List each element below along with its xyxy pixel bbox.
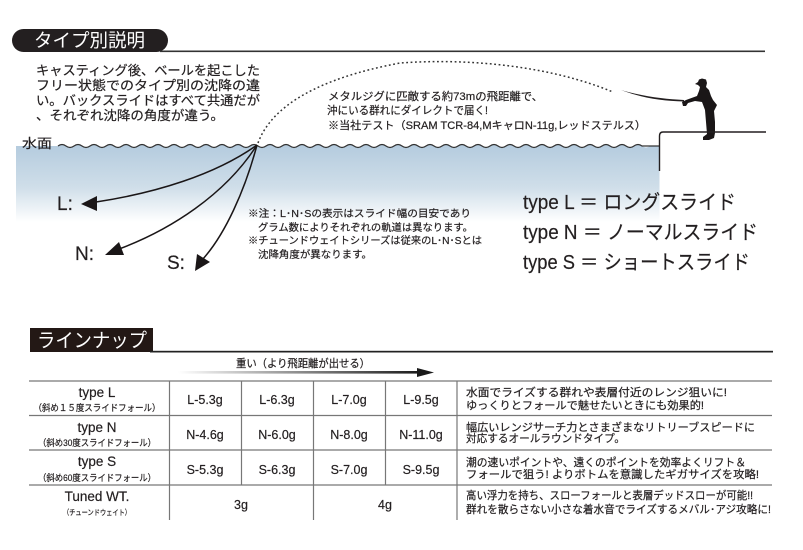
row: type N: N-8.0g xyxy=(330,428,368,442)
row: type N: type N xyxy=(77,420,117,435)
note: L N S caution: 沈降角度が異なります。 xyxy=(258,248,372,261)
descriptions: 高い浮力を持ち、スローフォールと表層デッドスローが可能!! xyxy=(466,488,753,502)
descriptions: フォールで狙う! よりボトムを意識したギガサイズを攻略! xyxy=(466,467,759,481)
heading: lineup: ラインナップ xyxy=(37,330,147,352)
arrow: type N xyxy=(105,145,257,255)
row: type N: N-6.0g xyxy=(258,428,296,442)
label: water surface: 水面 xyxy=(22,136,52,151)
intro text: キャスティング後、ベールを起こした xyxy=(36,63,260,78)
descriptions: ゆっくりとフォールで魅せたいときにも効果的! xyxy=(466,398,704,412)
intro text: フリー状態でのタイプ別の沈降の違 xyxy=(36,78,260,93)
descriptions xyxy=(466,385,771,516)
legend: type names: type L ＝ ロングスライド xyxy=(523,191,736,214)
labels: L N S: N: xyxy=(75,244,94,265)
water surface wave xyxy=(58,144,660,148)
row: tuned weight: （チューンドウェイト） xyxy=(63,508,131,517)
row: type S: S-7.0g xyxy=(331,463,367,477)
intro text xyxy=(36,63,260,123)
arrows: sink angles xyxy=(81,145,257,271)
intro text: い。バックスライドはすべて共通だが xyxy=(36,93,260,108)
descriptions: 水面でライズする群れや表層付近のレンジ狙いに! xyxy=(466,385,727,399)
row: type S: type S xyxy=(78,454,116,469)
row: type L: （斜め１５度スライドフォール） xyxy=(34,402,160,413)
panel: type explanation xyxy=(12,29,766,274)
labels: L N S: L: xyxy=(57,194,73,215)
row: type N xyxy=(38,420,443,448)
row: type S: S-6.3g xyxy=(259,463,295,477)
row: tuned weight: 4g xyxy=(378,498,392,512)
icon: angler on pier xyxy=(621,78,766,171)
descriptions: 幅広いレンジサーチ力とさまざまなリトリーブスピードに xyxy=(466,420,755,434)
labels: L N S xyxy=(57,194,185,274)
row: tuned weight: 3g xyxy=(234,498,248,512)
row: type N: N-4.6g xyxy=(186,428,224,442)
row: type L: L-7.0g xyxy=(331,393,367,407)
labels: L N S: S: xyxy=(167,253,185,274)
intro text: 、それぞれ沈降の角度が違う。 xyxy=(36,108,224,123)
note: casting distance xyxy=(327,90,646,132)
legend: type names: type S ＝ ショートスライド xyxy=(523,252,750,274)
heading: type explanation: タイプ別説明 xyxy=(34,30,145,51)
heading: lineup xyxy=(30,328,773,352)
row: type S: （斜め60度スライドフォール） xyxy=(38,472,156,483)
note: L N S caution: ※注：L･N･Sの表示はスライド幅の目安であり xyxy=(248,207,471,220)
legend: type names xyxy=(523,191,758,274)
panel: lineup xyxy=(29,328,773,520)
arrow: type S xyxy=(195,145,257,271)
weight arrow: 重い（より飛距離が出せる） xyxy=(236,356,370,370)
water body xyxy=(16,144,660,222)
row: type L xyxy=(34,385,439,413)
descriptions: 潮の速いポイントや、遠くのポイントを効率よくリフト＆ xyxy=(466,455,746,469)
row: type S: S-5.3g xyxy=(187,463,223,477)
note: casting distance: ※当社テスト（SRAM TCR-84,MキャロN-11g,レッドステルス） xyxy=(328,119,646,132)
row: tuned weight: Tuned WT. xyxy=(65,489,129,504)
note: L N S caution: グラム数によりそれぞれの軌道は異なります。 xyxy=(258,221,473,234)
descriptions: 対応するオールラウンドタイプ。 xyxy=(466,432,625,445)
row: type N: N-11.0g xyxy=(399,428,443,442)
casting trajectory xyxy=(258,62,613,143)
row: type L: L-5.3g xyxy=(187,393,223,407)
note: casting distance: 沖にいる群れにダイレクトで届く! xyxy=(327,104,488,117)
row: type L: L-9.5g xyxy=(403,393,439,407)
row: type L: type L xyxy=(79,385,116,400)
note: L N S caution: ※チューンドウェイトシリーズは従来のL･N･Sとは xyxy=(248,234,482,247)
lineup table xyxy=(29,381,772,520)
row: tuned weight xyxy=(63,489,392,517)
table grid xyxy=(29,381,772,520)
weight arrow xyxy=(178,356,434,377)
note: L N S caution xyxy=(248,207,482,261)
arrow: type L xyxy=(81,145,257,211)
heading: type explanation xyxy=(12,29,765,52)
row: type S xyxy=(38,454,439,483)
row: type S: S-9.5g xyxy=(403,463,439,477)
note: casting distance: メタルジグに匹敵する約73mの飛距離で、 xyxy=(328,90,543,103)
legend: type names: type N ＝ ノーマルスライド xyxy=(523,222,758,244)
row: type N: （斜め30度スライドフォール） xyxy=(38,437,156,448)
descriptions: 群れを散らさない小さな着水音でライズするメバル･アジ攻略に! xyxy=(466,502,771,516)
row: type L: L-6.3g xyxy=(259,393,295,407)
